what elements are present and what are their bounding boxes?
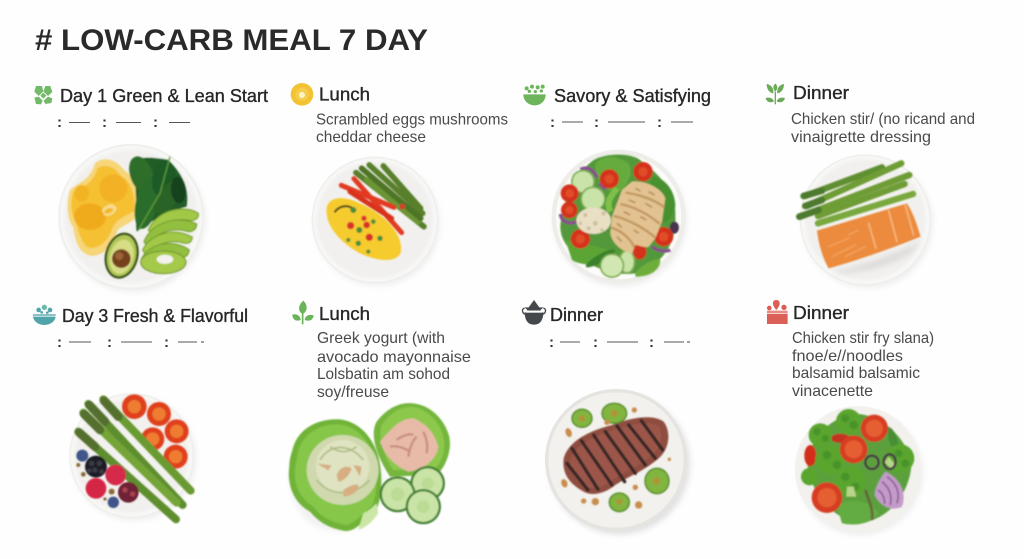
heading: lunch: Lunch [319, 84, 370, 104]
heading: dinner: Dinner [793, 83, 849, 103]
plate: eggs spinach avocado [58, 144, 205, 292]
description: dinner salmon: Chicken stir/ (no ricand and [791, 111, 975, 128]
description: dinner 2 [792, 330, 934, 400]
plate: asparagus tomato berries [69, 393, 196, 521]
bowl: chicken salad [552, 150, 687, 287]
heading: dinner: Dinner [793, 303, 849, 323]
description: dinner 2: vinacenette [792, 383, 873, 400]
icon: yellow flower [291, 83, 313, 106]
plate: omelette peppers asparagus [312, 157, 440, 286]
description: lunch: Scrambled eggs mushrooms [316, 112, 508, 128]
spinach [132, 158, 187, 232]
macro dashes: savory: : [594, 114, 599, 131]
macro dashes: day 3: : [57, 334, 62, 351]
onion [560, 168, 670, 251]
panel: day 3 [33, 305, 248, 521]
avocado slices [142, 209, 198, 265]
bowl: broccoli tomato salad [795, 406, 923, 535]
description: dinner 2: fnoe/e//noodles [792, 348, 903, 365]
lettuce wraps and cucumber [289, 403, 450, 532]
icon: teal bowl [33, 305, 56, 325]
panel: dinner steak [522, 300, 690, 535]
macro dashes: dinner: : [649, 334, 654, 351]
icon: dark pot [522, 300, 546, 325]
panel: dinner salmon [766, 83, 975, 288]
description: lunch 2: avocado mayonnaise [317, 349, 471, 366]
description: dinner 2: balsamid balsamic [792, 365, 920, 382]
description: lunch 2: soy/freuse [317, 384, 389, 401]
panel: savory and satisfying [523, 85, 711, 287]
icon: green bowl [523, 85, 546, 105]
icon: green herb leaves [766, 84, 785, 104]
heading: savory: Savory & Satisfying [554, 86, 711, 106]
panel: dinner broccoli salad [767, 300, 934, 535]
plate: grilled steak [545, 389, 690, 535]
macro dashes: day 1: : [102, 114, 107, 131]
plate: salmon asparagus [799, 154, 933, 288]
macro dashes: day 3: : [164, 334, 169, 351]
icon: red bowl [767, 300, 788, 324]
macro dashes: day 3: : [107, 334, 112, 351]
description: dinner salmon [791, 111, 975, 146]
heading: day 1: Day 1 Green & Lean Start [60, 86, 268, 106]
tomato [561, 162, 673, 260]
macro dashes: savory: : [657, 114, 662, 131]
macro dashes: dinner [549, 334, 690, 351]
title: # LOW-CARB MEAL 7 DAY [35, 24, 428, 57]
panel: lunch omelette [291, 83, 508, 286]
icon: green clover [34, 86, 52, 104]
quinoa [576, 207, 611, 234]
panel: lunch lettuce wraps [289, 301, 471, 532]
description: dinner salmon: vinaigrette dressing [791, 129, 931, 146]
macro dashes: savory: : [550, 114, 555, 131]
cucumber [571, 170, 595, 194]
macro dashes: dinner: : [549, 334, 554, 351]
heading: day 3: Day 3 Fresh & Flavorful [62, 306, 248, 326]
description: dinner 2: Chicken stir fry slana) [792, 330, 934, 347]
macro dashes: savory [550, 114, 693, 131]
heading: lunch: Lunch [319, 304, 370, 324]
description: lunch 2: Lolsbatin am sohod [317, 366, 450, 383]
description: lunch [316, 112, 508, 146]
avocado half [100, 229, 143, 282]
description: lunch: cheddar cheese [316, 129, 426, 146]
chicken [610, 181, 665, 253]
broccoli [801, 409, 914, 497]
heading: dinner: Dinner [550, 305, 603, 325]
macro dashes: dinner: : [593, 334, 598, 351]
tomato [812, 415, 888, 513]
macro dashes: day 1 [57, 114, 190, 131]
macro dashes: day 1: : [57, 114, 62, 131]
macro dashes: day 1: : [153, 114, 158, 131]
panel: day 1 breakfast [34, 86, 268, 292]
macro dashes: day 3 [57, 334, 204, 351]
description: lunch 2: Greek yogurt (with [317, 330, 445, 347]
description: lunch 2 [317, 330, 471, 401]
onion [865, 454, 896, 469]
icon: green herb sprig [292, 301, 314, 324]
